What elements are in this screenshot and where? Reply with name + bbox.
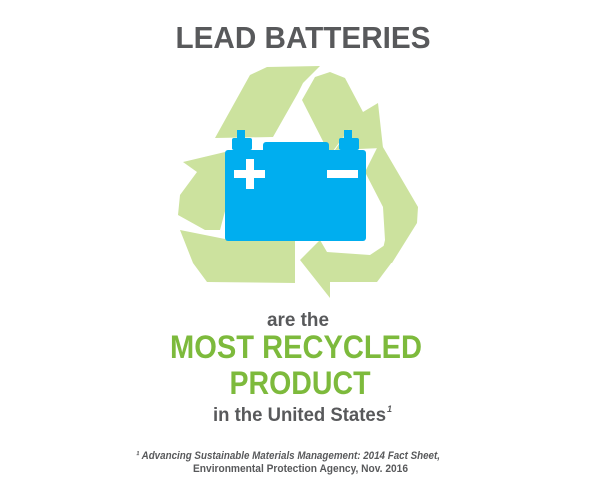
title: LEAD BATTERIES	[176, 20, 430, 55]
text: in the United States: in the United States	[213, 405, 386, 426]
icon: recycle symbol	[178, 66, 418, 298]
text: are the: are the	[267, 310, 329, 331]
superscript: 1	[387, 404, 392, 414]
headline: product: PRODUCT	[230, 365, 371, 401]
footnote	[136, 450, 440, 475]
footnote: ¹ Advancing Sustainable Materials Management: 2014 Fact Sheet,	[136, 450, 440, 462]
headline: most recycled: MOST RECYCLED	[170, 329, 422, 365]
icon: battery	[225, 130, 366, 241]
footnote: Environmental Protection Agency, Nov. 2016	[193, 463, 408, 475]
